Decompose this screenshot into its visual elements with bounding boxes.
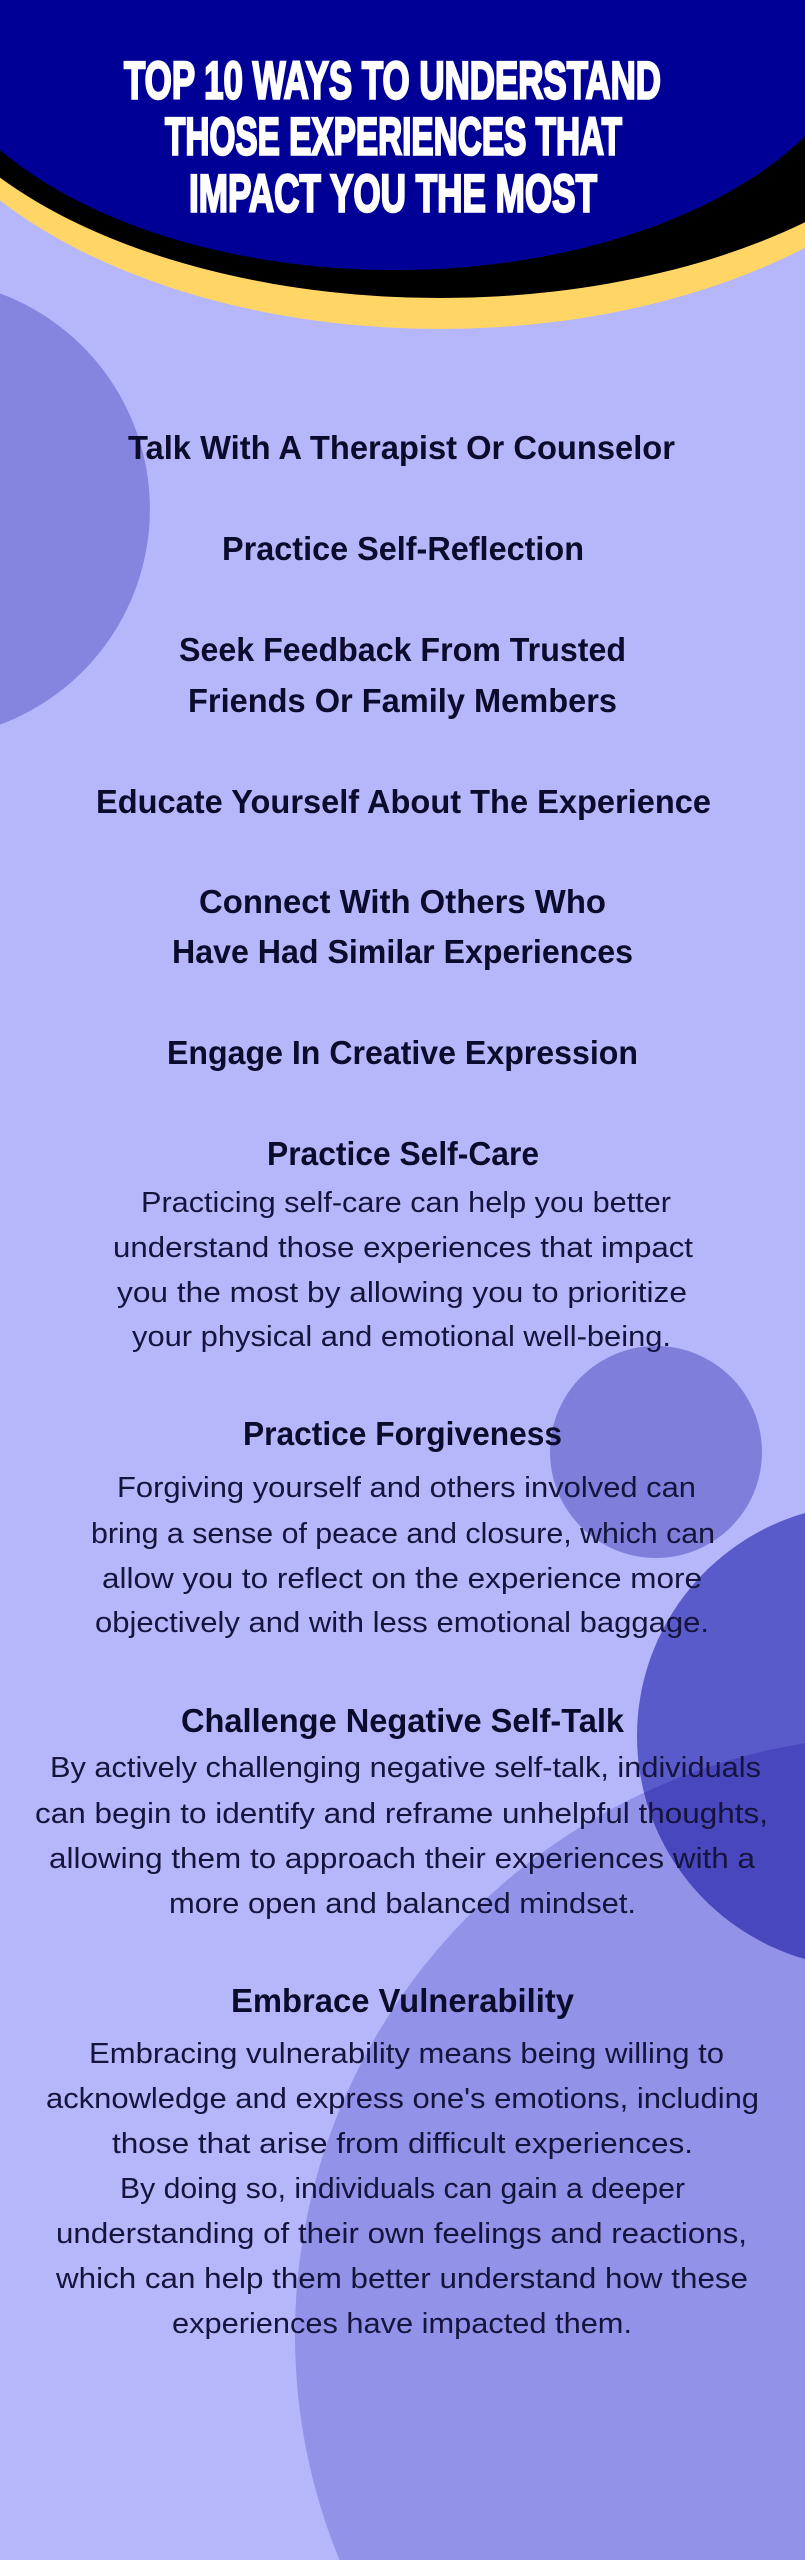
- item 5: heading: [172, 883, 633, 970]
- item 8: practice forgiveness: Practice Forgiveness: [243, 1415, 562, 1452]
- item 10: embrace vulnerability: understanding of their own feelings and reactions,: [56, 2218, 747, 2250]
- item 10: embrace vulnerability: Embrace Vulnerability: [231, 1982, 575, 2019]
- item 9: challenge negative self-talk: can begin to identify and reframe unhelpful thoughts,: [35, 1798, 768, 1830]
- item 4: heading: Educate Yourself About The Experience: [96, 783, 711, 820]
- item 7: practice self-care: you the most by allowing you to prioritize: [117, 1277, 687, 1309]
- item 2: heading: Practice Self-Reflection: [222, 530, 584, 567]
- item 3: heading: Friends Or Family Members: [188, 682, 617, 719]
- item 7: practice self-care: Practicing self-care can help you better: [141, 1187, 671, 1219]
- item 7: practice self-care: Practice Self-Care: [267, 1135, 539, 1172]
- item 10: embrace vulnerability: acknowledge and express one's emotions, including: [46, 2083, 759, 2115]
- item 9: challenge negative self-talk: more open and balanced mindset.: [169, 1888, 636, 1920]
- item 9: challenge negative self-talk: allowing them to approach their experiences with a: [49, 1843, 756, 1875]
- item 8: practice forgiveness: Forgiving yourself and others involved can: [117, 1472, 696, 1504]
- item 9: challenge negative self-talk: By actively challenging negative self-talk, individuals: [50, 1752, 761, 1784]
- item 9: challenge negative self-talk: Challenge Negative Self-Talk: [181, 1702, 625, 1739]
- item 3: heading: Seek Feedback From Trusted: [179, 631, 626, 668]
- item 7: practice self-care: [113, 1135, 693, 1353]
- decorative circle: large bottom right: [295, 1743, 805, 2560]
- item 3: heading: [179, 631, 626, 719]
- item 8: practice forgiveness: objectively and with less emotional baggage.: [95, 1607, 709, 1639]
- decorative circle: middle right small: [550, 1346, 762, 1558]
- item 5: heading: Connect With Others Who: [199, 883, 606, 920]
- item 8: practice forgiveness: bring a sense of peace and closure, which can: [91, 1518, 715, 1550]
- item 10: embrace vulnerability: By doing so, individuals can gain a deeper: [120, 2173, 685, 2205]
- item 9: challenge negative self-talk: [35, 1702, 768, 1920]
- header banner arcs: [0, 0, 805, 329]
- item 8: practice forgiveness: [91, 1415, 715, 1639]
- title: IMPACT YOU THE MOST: [189, 164, 597, 224]
- item 10: embrace vulnerability: which can help them better understand how these: [55, 2263, 748, 2295]
- item 6: heading: Engage In Creative Expression: [167, 1034, 638, 1071]
- item 5: heading: Have Had Similar Experiences: [172, 933, 633, 970]
- item 1: heading: Talk With A Therapist Or Counselor: [128, 429, 675, 466]
- item 10: embrace vulnerability: those that arise from difficult experiences.: [112, 2128, 693, 2160]
- item 10: embrace vulnerability: experiences have impacted them.: [172, 2308, 632, 2340]
- title: [124, 52, 661, 224]
- item 7: practice self-care: your physical and emotional well-being.: [132, 1321, 671, 1353]
- item 8: practice forgiveness: allow you to reflect on the experience more: [102, 1563, 702, 1595]
- item 7: practice self-care: understand those experiences that impact: [113, 1232, 693, 1264]
- decorative circle: right side dark: [637, 1513, 805, 1959]
- item 10: embrace vulnerability: Embracing vulnerability means being willing to: [89, 2038, 724, 2070]
- decorative circle: upper left: [0, 293, 150, 725]
- item 10: embrace vulnerability: [46, 1982, 759, 2340]
